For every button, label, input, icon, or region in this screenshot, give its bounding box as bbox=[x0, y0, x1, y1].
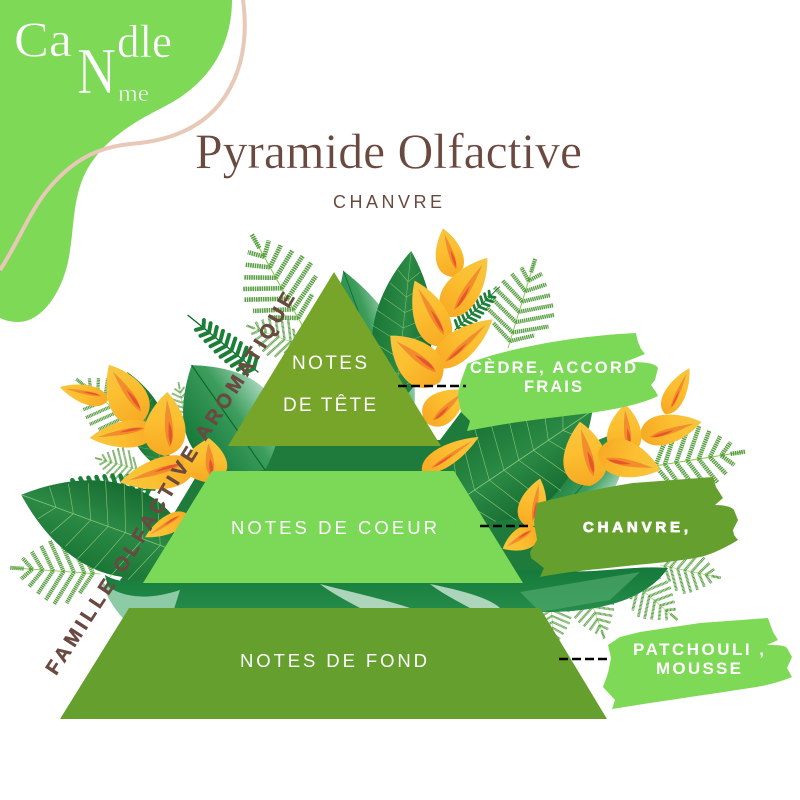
tier label: notes de tête: DE TÊTE bbox=[283, 394, 376, 416]
large green leaves bbox=[5, 248, 668, 626]
heliconia flower left bbox=[57, 356, 230, 546]
pyramid bottom tier bbox=[60, 608, 607, 719]
base notes ingredients bbox=[633, 640, 764, 678]
peach curved line bbox=[0, 0, 245, 270]
top notes ingredients: CÈDRE, ACCORD bbox=[470, 358, 636, 377]
brush label: top notes bbox=[458, 333, 658, 431]
brush label: heart notes bbox=[530, 477, 738, 577]
heart notes ingredients: CHANVRE, bbox=[583, 519, 688, 536]
pyramid bbox=[60, 272, 607, 719]
subtitle: CHANVRE bbox=[333, 192, 442, 212]
top notes ingredients: FRAIS bbox=[524, 378, 582, 396]
logo: me bbox=[118, 81, 149, 107]
logo bbox=[14, 11, 172, 108]
base notes ingredients: PATCHOULI , bbox=[633, 640, 764, 659]
tier label: notes de tête bbox=[283, 353, 376, 416]
pyramid middle tier bbox=[143, 471, 523, 583]
tropical foliage illustration bbox=[5, 216, 751, 648]
connector: heart notes bbox=[480, 525, 531, 527]
ferns behind leaves bbox=[7, 216, 751, 648]
brush label: base notes bbox=[603, 618, 792, 709]
heliconia flower top right bbox=[375, 225, 501, 479]
connector: top notes bbox=[398, 385, 466, 387]
curved label: olfactory family: FAMILLE OLFACTIVE AROMATIQUE bbox=[45, 291, 295, 676]
background blob bbox=[0, 0, 232, 322]
top notes ingredients bbox=[470, 358, 636, 396]
connector: base notes bbox=[559, 658, 609, 660]
heliconia flower right bbox=[498, 363, 705, 559]
title: Pyramide Olfactive bbox=[195, 123, 582, 179]
logo: dle bbox=[117, 16, 172, 68]
logo: N bbox=[77, 35, 116, 108]
tier label: notes de tête: NOTES bbox=[292, 353, 367, 374]
tier label: notes de fond: NOTES DE FOND bbox=[240, 650, 427, 671]
tier label: notes de coeur: NOTES DE COEUR bbox=[231, 517, 437, 538]
pyramid top tier bbox=[228, 272, 441, 446]
logo: Ca bbox=[14, 11, 72, 67]
base notes ingredients: MOUSSE bbox=[656, 659, 741, 678]
